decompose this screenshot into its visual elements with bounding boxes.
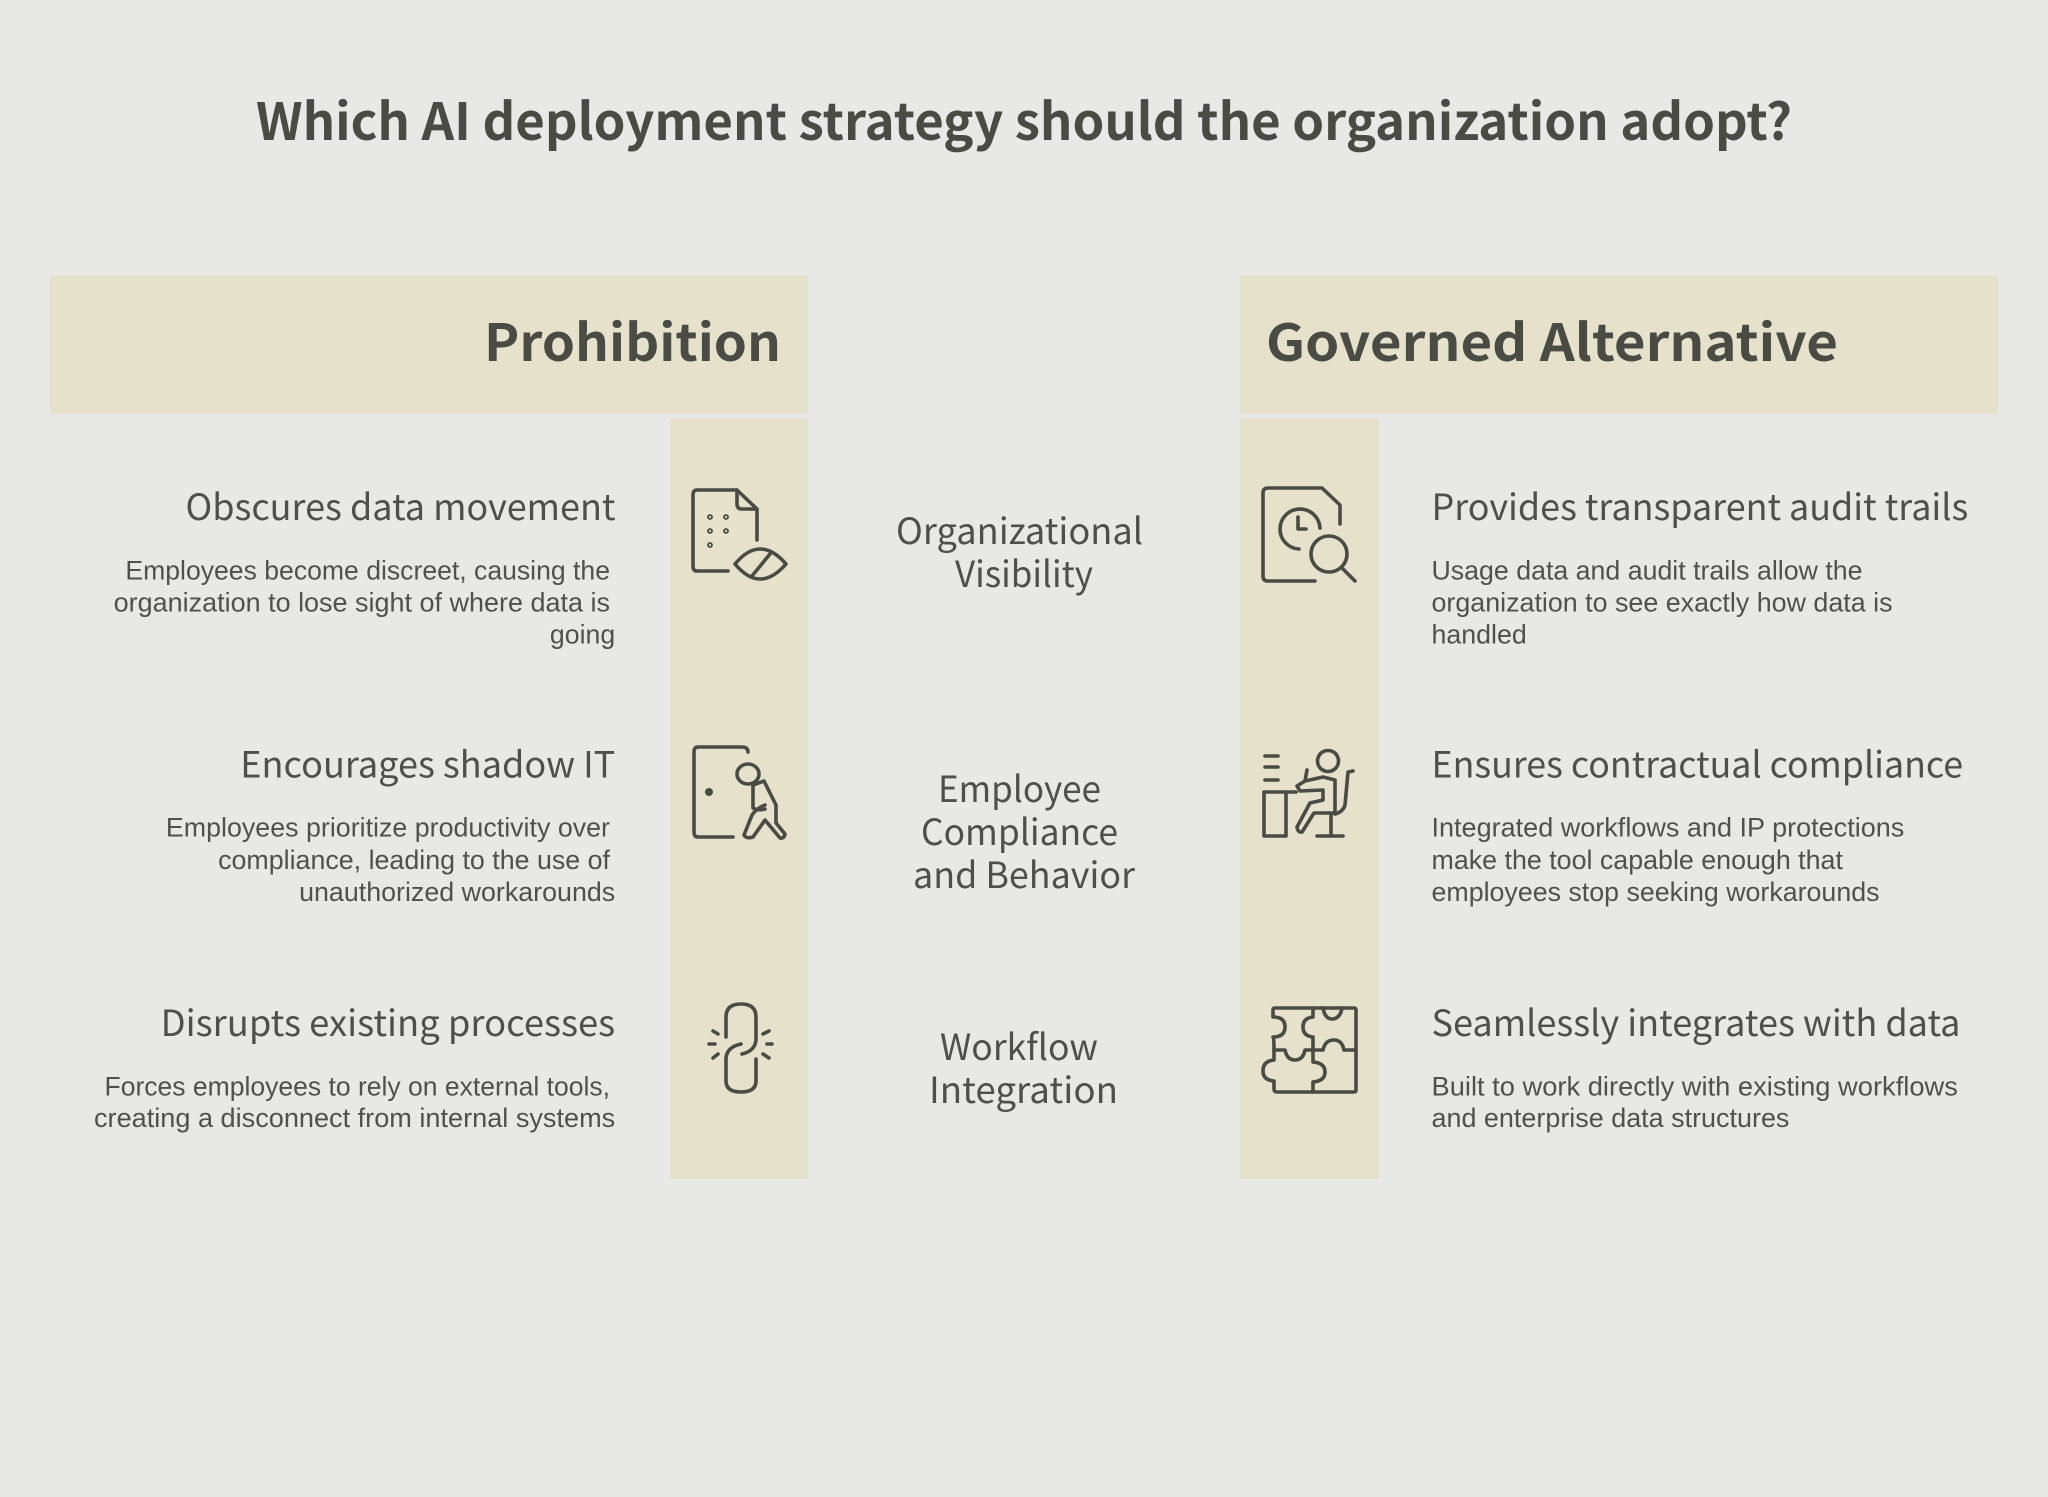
row 1 left: obscures data movement [114, 479, 616, 650]
row 1 left: obscures data movement: organization to lose sight of where data is [114, 588, 610, 618]
row 2 left: encourages shadow IT: unauthorized workarounds [299, 877, 615, 907]
row 1 label: organizational visibility: Organizational [896, 503, 1143, 555]
row 1 right: provides transparent audit trails: organization to see exactly how data is [1432, 588, 1892, 618]
row 2 left: encourages shadow IT: Employees prioritize productivity over [166, 812, 610, 842]
row 1 right: provides transparent audit trails: handled [1432, 620, 1527, 650]
row 2 label: employee compliance and behavior: and Behavior [913, 847, 1136, 899]
row 1 left: obscures data movement: going [550, 620, 615, 650]
panel: governed alternative header [1240, 275, 1998, 414]
row 1 label: organizational visibility [896, 503, 1143, 598]
row 3 label: workflow integration: Integration [929, 1062, 1118, 1114]
row 2 right: ensures contractual compliance: employees stop seeking workarounds [1432, 877, 1880, 907]
row 1 right: provides transparent audit trails: Usage data and audit trails allow the [1432, 556, 1862, 586]
row 1 right: provides transparent audit trails: Provides transparent audit trails [1432, 479, 1968, 531]
row 2 label: employee compliance and behavior: Compliance [921, 804, 1118, 856]
row 2 left: encourages shadow IT: compliance, leading to the use of [218, 845, 611, 875]
row 2 label: employee compliance and behavior [913, 761, 1136, 899]
row 2 left: encourages shadow IT: Encourages shadow IT [240, 736, 615, 788]
row 2 label: employee compliance and behavior: Employee [938, 761, 1101, 813]
row 3 left: disrupts existing processes: creating a disconnect from internal systems [94, 1103, 615, 1133]
row 2 right: ensures contractual compliance: Ensures contractual compliance [1432, 736, 1963, 788]
row 3 left: disrupts existing processes [94, 995, 615, 1133]
icon: document with hidden eye [693, 490, 786, 579]
row 3 right: seamlessly integrates with data: and enterprise data structures [1432, 1103, 1789, 1133]
icon: broken chain link [709, 1004, 772, 1092]
icon: person working at desk [1264, 750, 1353, 836]
title: Which AI deployment strategy should the organization adopt? [256, 81, 1792, 155]
panel: prohibition icon column [670, 418, 808, 1179]
row 2 right: ensures contractual compliance [1432, 736, 1963, 907]
row 1 left: obscures data movement: Employees become discreet, causing the [125, 556, 610, 586]
panel: prohibition header [50, 275, 808, 414]
row 3 right: seamlessly integrates with data: Seamlessly integrates with data [1432, 995, 1960, 1047]
row 3 left: disrupts existing processes: Forces employees to rely on external tools, [104, 1072, 610, 1102]
icon: puzzle pieces [1263, 1008, 1356, 1092]
heading: Governed Alternative: Governed Alternative [1266, 302, 1838, 376]
row 1 left: obscures data movement: Obscures data movement [186, 479, 616, 531]
row 3 right: seamlessly integrates with data: Built to work directly with existing workflows [1432, 1072, 1958, 1102]
row 2 right: ensures contractual compliance: make the tool capable enough that [1432, 845, 1844, 875]
heading: Prohibition: Prohibition [484, 302, 781, 376]
row 3 label: workflow integration [929, 1019, 1118, 1114]
row 2 right: ensures contractual compliance: Integrated workflows and IP protections [1432, 812, 1904, 842]
row 1 label: organizational visibility: Visibility [955, 546, 1093, 598]
row 3 left: disrupts existing processes: Disrupts existing processes [161, 995, 615, 1047]
row 3 label: workflow integration: Workflow [940, 1019, 1098, 1071]
panel: governed icon column [1240, 418, 1378, 1179]
row 2 left: encourages shadow IT [166, 736, 615, 907]
icon: person walking out of door [694, 747, 785, 838]
row 1 right: provides transparent audit trails [1432, 479, 1968, 650]
row 3 right: seamlessly integrates with data [1432, 995, 1960, 1133]
icon: document with clock and magnifier [1263, 488, 1355, 581]
